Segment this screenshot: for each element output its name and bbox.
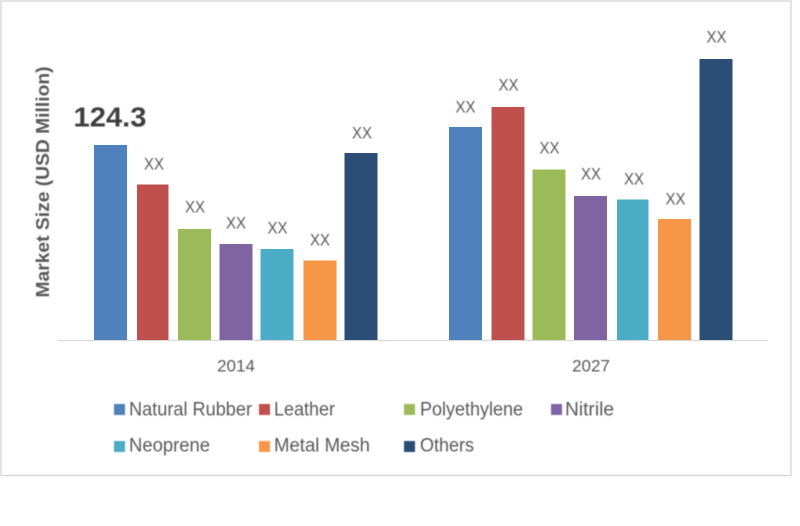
bar group: 2014 bbox=[94, 145, 378, 340]
value label: Polyethylene 2027: XX bbox=[540, 138, 560, 158]
highlighted value: 124.3 bbox=[74, 102, 146, 132]
bar: Others 2027 bbox=[700, 59, 732, 340]
bar: Natural Rubber 2014 bbox=[94, 145, 127, 340]
value label: Nitrile 2014: XX bbox=[226, 214, 246, 232]
legend item: Nitrile: Nitrile bbox=[565, 400, 614, 420]
legend item: Leather: Leather bbox=[274, 400, 336, 420]
category label: 2027: 2027 bbox=[572, 356, 610, 376]
bar: Polyethylene 2014 bbox=[178, 229, 211, 340]
legend item: Neoprene: Neoprene bbox=[129, 436, 210, 456]
value label: Natural Rubber 2027: XX bbox=[456, 98, 476, 116]
category label: 2014: 2014 bbox=[217, 356, 255, 376]
legend item: Metal Mesh: Metal Mesh bbox=[274, 436, 370, 456]
value label: Nitrile 2027: XX bbox=[581, 164, 601, 184]
legend item: Natural Rubber: Natural Rubber bbox=[129, 400, 253, 420]
bar: Metal Mesh 2014 bbox=[304, 260, 336, 340]
legend item: Polyethylene: Polyethylene bbox=[420, 400, 523, 420]
bar: Natural Rubber 2027 bbox=[449, 127, 482, 340]
bar: Neoprene 2014 bbox=[260, 249, 294, 340]
y axis title: Market Size (USD Million) bbox=[33, 66, 53, 298]
value label: Others 2027: XX bbox=[706, 28, 726, 46]
bar: Others 2014 bbox=[344, 153, 378, 340]
value label: Neoprene 2027: XX bbox=[624, 170, 644, 188]
value label: Leather 2014: XX bbox=[144, 154, 164, 174]
bar: Leather 2027 bbox=[492, 107, 524, 340]
bar: Leather 2014 bbox=[137, 184, 168, 340]
value label: Metal Mesh 2027: XX bbox=[666, 190, 686, 208]
value label: Polyethylene 2014: XX bbox=[185, 198, 205, 216]
legend item: Others: Others bbox=[420, 436, 474, 456]
bar: Nitrile 2014 bbox=[220, 244, 252, 340]
value label: Leather 2027: XX bbox=[498, 76, 518, 94]
bar group: 2027 bbox=[449, 59, 732, 340]
bar: Metal Mesh 2027 bbox=[658, 219, 691, 340]
legend bbox=[114, 400, 614, 456]
value label: Metal Mesh 2014: XX bbox=[310, 230, 330, 250]
value labels bbox=[74, 28, 726, 250]
bar: Nitrile 2027 bbox=[574, 196, 607, 340]
value label: Others 2014: XX bbox=[352, 124, 372, 142]
bar: Polyethylene 2027 bbox=[532, 170, 566, 340]
x axis line bbox=[58, 340, 768, 342]
category labels bbox=[217, 356, 610, 376]
bar: Neoprene 2027 bbox=[617, 200, 648, 340]
value label: Neoprene 2014: XX bbox=[268, 218, 288, 238]
